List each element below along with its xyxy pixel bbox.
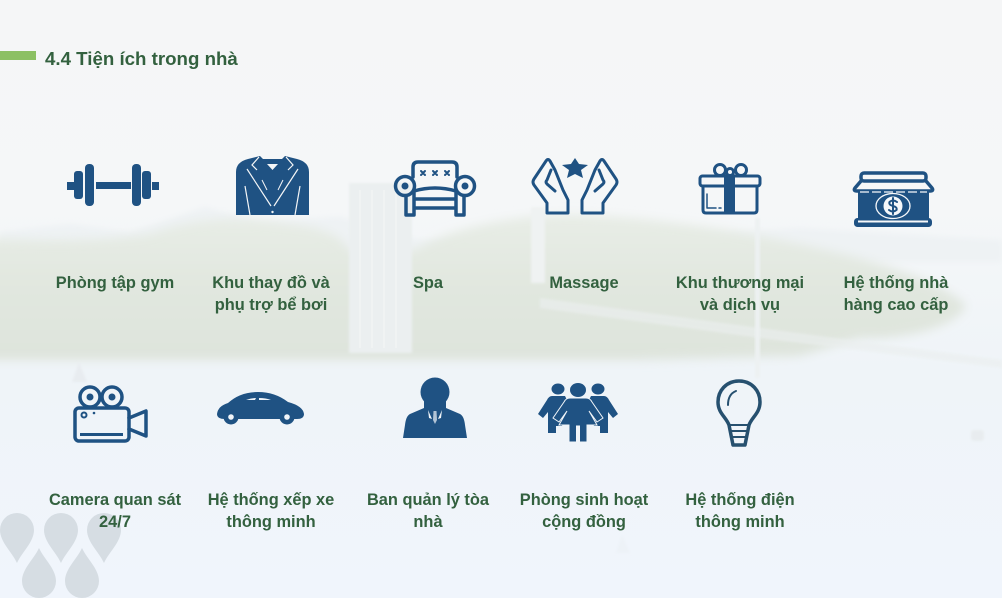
label: Ban quản lý tòa nhà: Ban quản lý tòa [367, 491, 490, 509]
label: Massage: Massage [549, 274, 619, 292]
icon: restaurant storefront [854, 173, 933, 227]
label: Ban quản lý tòa nhà [367, 491, 490, 531]
label: Hệ thống xếp xe thông minh: Hệ thống xếp xe [208, 491, 334, 509]
icon: group of people [538, 383, 618, 442]
label: Camera quan sát 24/7: Camera quan sát [49, 491, 182, 509]
label: Phòng tập gym: Phòng tập gym [56, 274, 174, 292]
label: Khu thay đồ và phụ trợ bể bơi: Khu thay đồ và [212, 274, 331, 292]
label: Phòng sinh hoạt cộng đồng [520, 491, 649, 531]
label: Hệ thống điện thông minh [685, 491, 795, 531]
label: Khu thương mại và dịch vụ: và dịch vụ [700, 296, 780, 314]
label: Hệ thống nhà hàng cao cấp: hàng cao cấp [844, 296, 948, 314]
label: Ban quản lý tòa nhà: nhà [413, 513, 443, 531]
icon: manager bust [403, 378, 467, 438]
label: Khu thay đồ và phụ trợ bể bơi: phụ trợ bể bơi [215, 296, 327, 314]
label: Hệ thống nhà hàng cao cấp: Hệ thống nhà [844, 274, 949, 292]
label: Spa: Spa [413, 274, 444, 292]
heading: 4.4 Tiện ích trong nhà [45, 48, 238, 69]
icon: light bulb [718, 381, 760, 445]
label: Camera quan sát 24/7: 24/7 [99, 513, 131, 531]
label: Phòng sinh hoạt cộng đồng: Phòng sinh hoạt [520, 491, 649, 509]
icon: armchair [396, 162, 474, 215]
label: Camera quan sát 24/7 [49, 491, 182, 531]
icon: gift box [700, 164, 760, 214]
icon: car [217, 392, 304, 424]
label: Khu thương mại và dịch vụ: Khu thương mại [676, 274, 804, 292]
label: Hệ thống nhà hàng cao cấp [844, 274, 949, 314]
icon: video camera [75, 387, 146, 441]
heading accent bar [0, 51, 36, 60]
icon: hands with star [533, 158, 617, 213]
icon: suit [236, 156, 309, 215]
label: Hệ thống xếp xe thông minh [208, 491, 334, 531]
label: Phòng sinh hoạt cộng đồng: cộng đồng [542, 513, 626, 531]
label: Khu thay đồ và phụ trợ bể bơi [212, 274, 331, 314]
label: Hệ thống điện thông minh: thông minh [695, 513, 785, 531]
logo watermark: water drops [0, 513, 121, 598]
label: Khu thương mại và dịch vụ [676, 274, 804, 314]
label: Hệ thống xếp xe thông minh: thông minh [226, 513, 316, 531]
label: Hệ thống điện thông minh: Hệ thống điện [685, 491, 795, 509]
icon: dumbbell [67, 164, 159, 206]
